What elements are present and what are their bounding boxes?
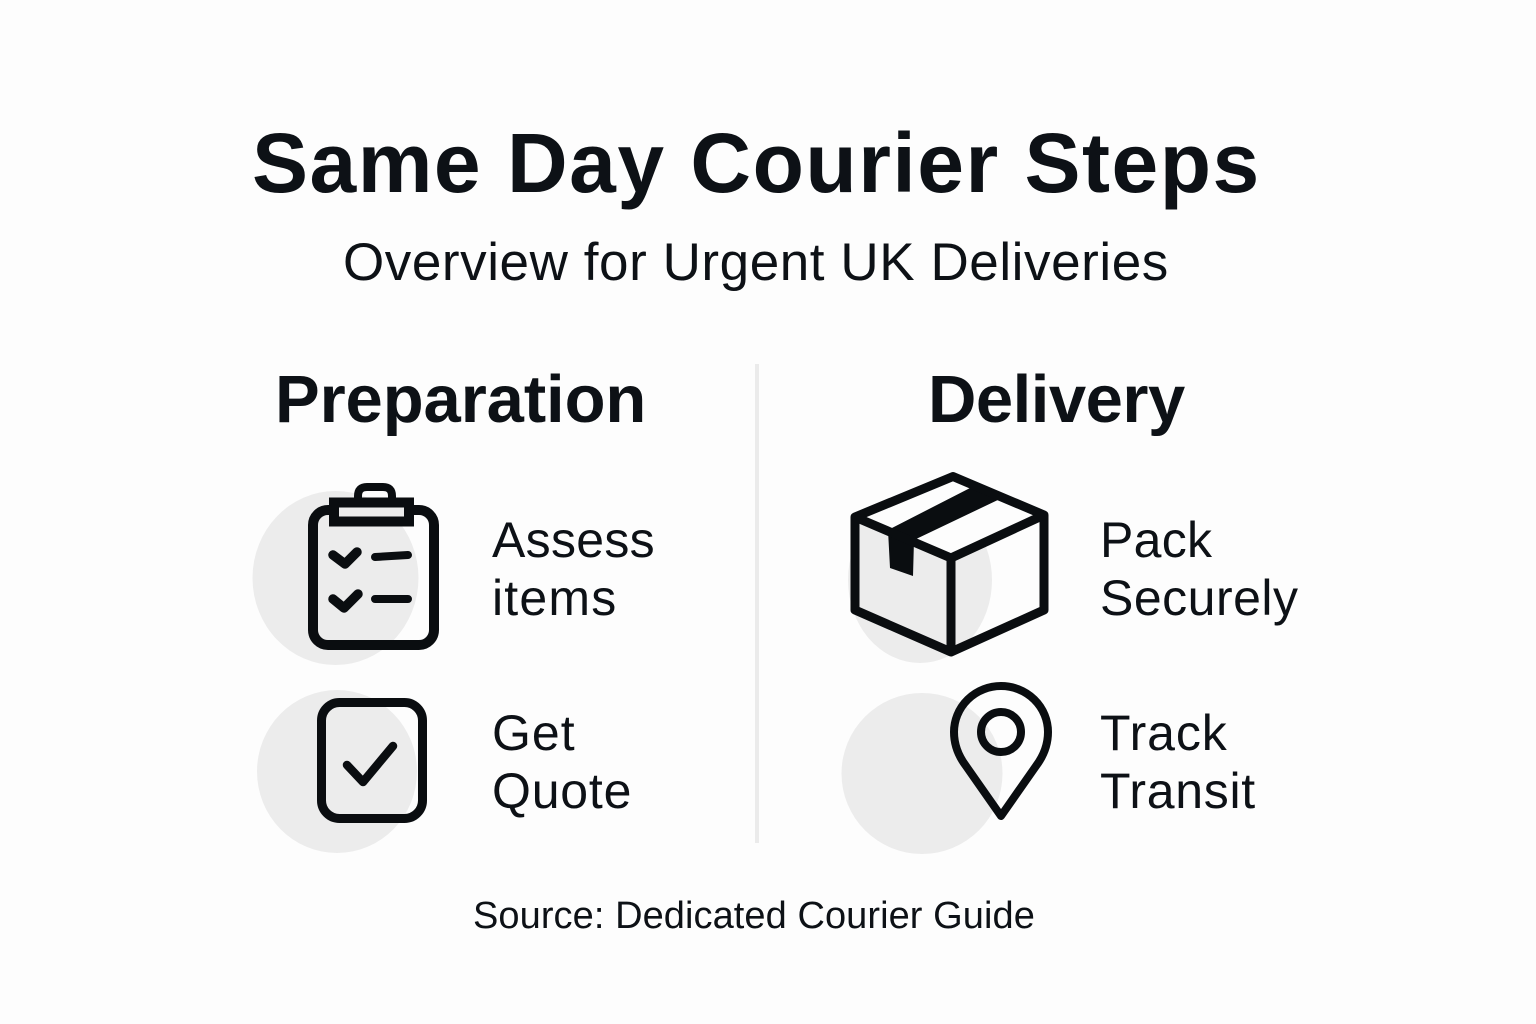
source note: Source: Dedicated Courier Guide bbox=[473, 895, 1035, 937]
icon: clipboard bbox=[252, 487, 434, 665]
text: Pack Securely: Pack bbox=[1100, 512, 1212, 568]
text: Pack Securely bbox=[1100, 512, 1299, 626]
text: Assess items bbox=[492, 512, 655, 626]
text: Track Transit: Transit bbox=[1100, 763, 1256, 819]
column divider bbox=[755, 364, 759, 843]
text: Assess items: Assess bbox=[492, 512, 655, 568]
text: Track Transit bbox=[1100, 705, 1256, 819]
text: Get Quote: Get bbox=[492, 705, 576, 761]
text: Pack Securely: Securely bbox=[1100, 570, 1299, 626]
heading: Preparation: Preparation bbox=[275, 362, 646, 437]
icon: checkbox bbox=[257, 690, 422, 853]
text: Track Transit: Track bbox=[1100, 705, 1228, 761]
subtitle: Overview for Urgent UK Deliveries bbox=[343, 233, 1169, 292]
text: Get Quote bbox=[492, 705, 632, 819]
title: Same Day Courier Steps bbox=[252, 116, 1261, 210]
icon: location pin bbox=[842, 686, 1048, 854]
text: Assess items: items bbox=[492, 570, 617, 626]
heading: Delivery: Delivery bbox=[928, 362, 1185, 437]
icon: parcel box bbox=[848, 476, 1044, 663]
text: Get Quote: Quote bbox=[492, 763, 632, 819]
